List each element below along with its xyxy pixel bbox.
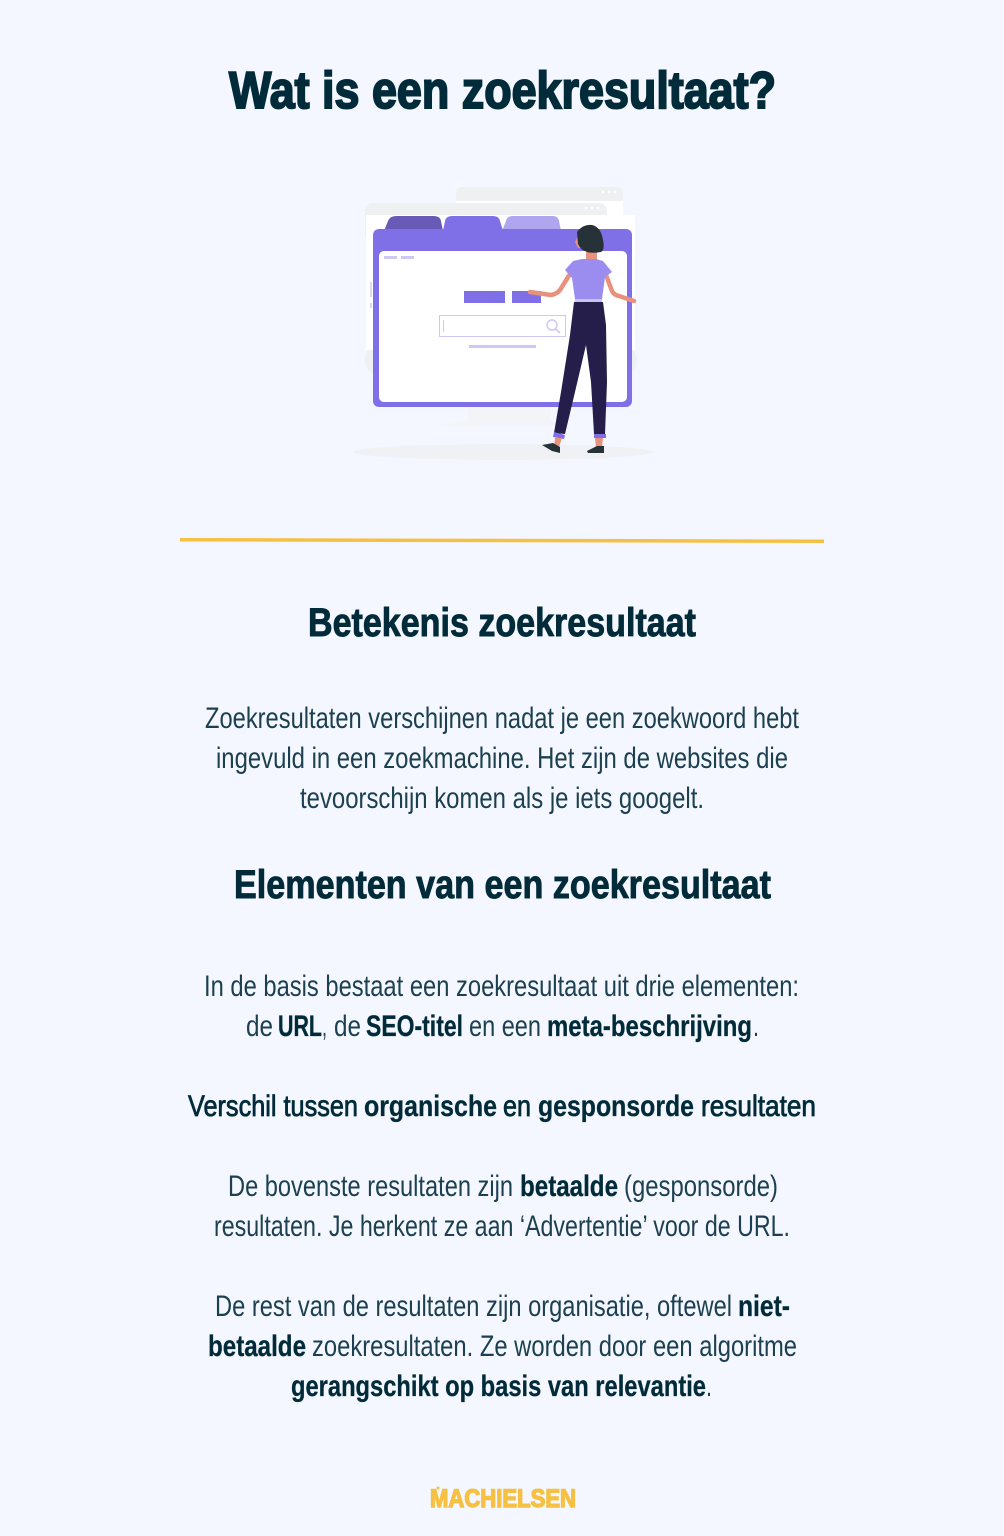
shoes xyxy=(542,443,560,453)
heading: betekenis: Betekenis zoekresultaat xyxy=(308,601,696,645)
person xyxy=(530,225,634,453)
text block: elementen: SEO-titel xyxy=(366,1010,463,1043)
divider line xyxy=(180,538,824,543)
subheading: verschil: resultaten xyxy=(701,1090,816,1123)
shirt xyxy=(565,259,612,299)
window dashes xyxy=(384,256,414,259)
buttons xyxy=(464,291,541,303)
arms xyxy=(530,274,570,295)
pants xyxy=(554,302,607,434)
ground shadow xyxy=(353,444,653,460)
text block: elementen: In de basis bestaat een zoekresultaat uit drie elementen: xyxy=(204,970,799,1003)
underline xyxy=(469,345,536,348)
text block: elementen xyxy=(204,970,799,1043)
text block: betekenis xyxy=(205,702,800,815)
back window 2 xyxy=(365,203,637,375)
text block: organische resultaten: . xyxy=(706,1370,712,1403)
text block: organische resultaten: betaalde xyxy=(208,1330,306,1363)
text block: organische resultaten: zoekresultaten. Ze worden door een algoritme xyxy=(312,1330,797,1363)
text block: elementen: en een xyxy=(469,1010,541,1043)
belt xyxy=(575,299,602,302)
text block: elementen: , xyxy=(322,1010,327,1043)
search box xyxy=(440,316,566,336)
text block: betekenis: tevoorschijn komen als je iets googelt. xyxy=(300,782,704,815)
ankles xyxy=(554,438,562,447)
subheading: verschil xyxy=(188,1090,816,1123)
subheading: verschil: Verschil tussen xyxy=(188,1090,358,1123)
text block: betekenis: Zoekresultaten verschijnen nadat je een zoekwoord hebt xyxy=(205,702,800,735)
neck and face xyxy=(586,248,597,261)
text block: organische resultaten: niet- xyxy=(738,1290,790,1323)
text block: betaalde resultaten: resultaten. Je herkent ze aan ‘Advertentie’ voor de URL. xyxy=(214,1210,790,1243)
text block: organische resultaten xyxy=(208,1290,797,1403)
text block: elementen: meta-beschrijving xyxy=(547,1010,752,1043)
folder tabs xyxy=(384,216,561,231)
text block: betekenis: ingevuld in een zoekmachine. Het zijn de websites die xyxy=(216,742,788,775)
text block: elementen: . xyxy=(753,1010,759,1043)
heading: elementen: Elementen van een zoekresultaat xyxy=(234,863,771,907)
subheading: verschil: en xyxy=(503,1090,531,1123)
text block: organische resultaten: gerangschikt op basis van relevantie xyxy=(291,1370,706,1403)
title: Wat is een zoekresultaat? xyxy=(229,62,776,120)
hair xyxy=(577,225,604,253)
text block: organische resultaten: De rest van de resultaten zijn organisatie, oftewel xyxy=(215,1290,732,1323)
back window 1 xyxy=(456,187,623,261)
subheading: verschil: organische xyxy=(364,1090,497,1123)
text block: betaalde resultaten xyxy=(214,1170,790,1243)
subheading: verschil: gesponsorde xyxy=(538,1090,694,1123)
cuffs xyxy=(553,432,565,439)
text block: elementen: URL xyxy=(278,1010,322,1043)
text block: betaalde resultaten: betaalde xyxy=(520,1170,618,1203)
text block: elementen: de xyxy=(334,1010,361,1043)
main window content xyxy=(379,251,627,402)
text block: betaalde resultaten: (gesponsorde) xyxy=(624,1170,778,1203)
monitor stand xyxy=(438,407,560,426)
text block: betaalde resultaten: De bovenste resultaten zijn xyxy=(228,1170,513,1203)
logo: Machielsen: MACHIELSEN xyxy=(430,1485,576,1513)
main window frame xyxy=(373,229,632,407)
illustration: woman at search window xyxy=(353,187,653,460)
text block: elementen: de xyxy=(246,1010,273,1043)
